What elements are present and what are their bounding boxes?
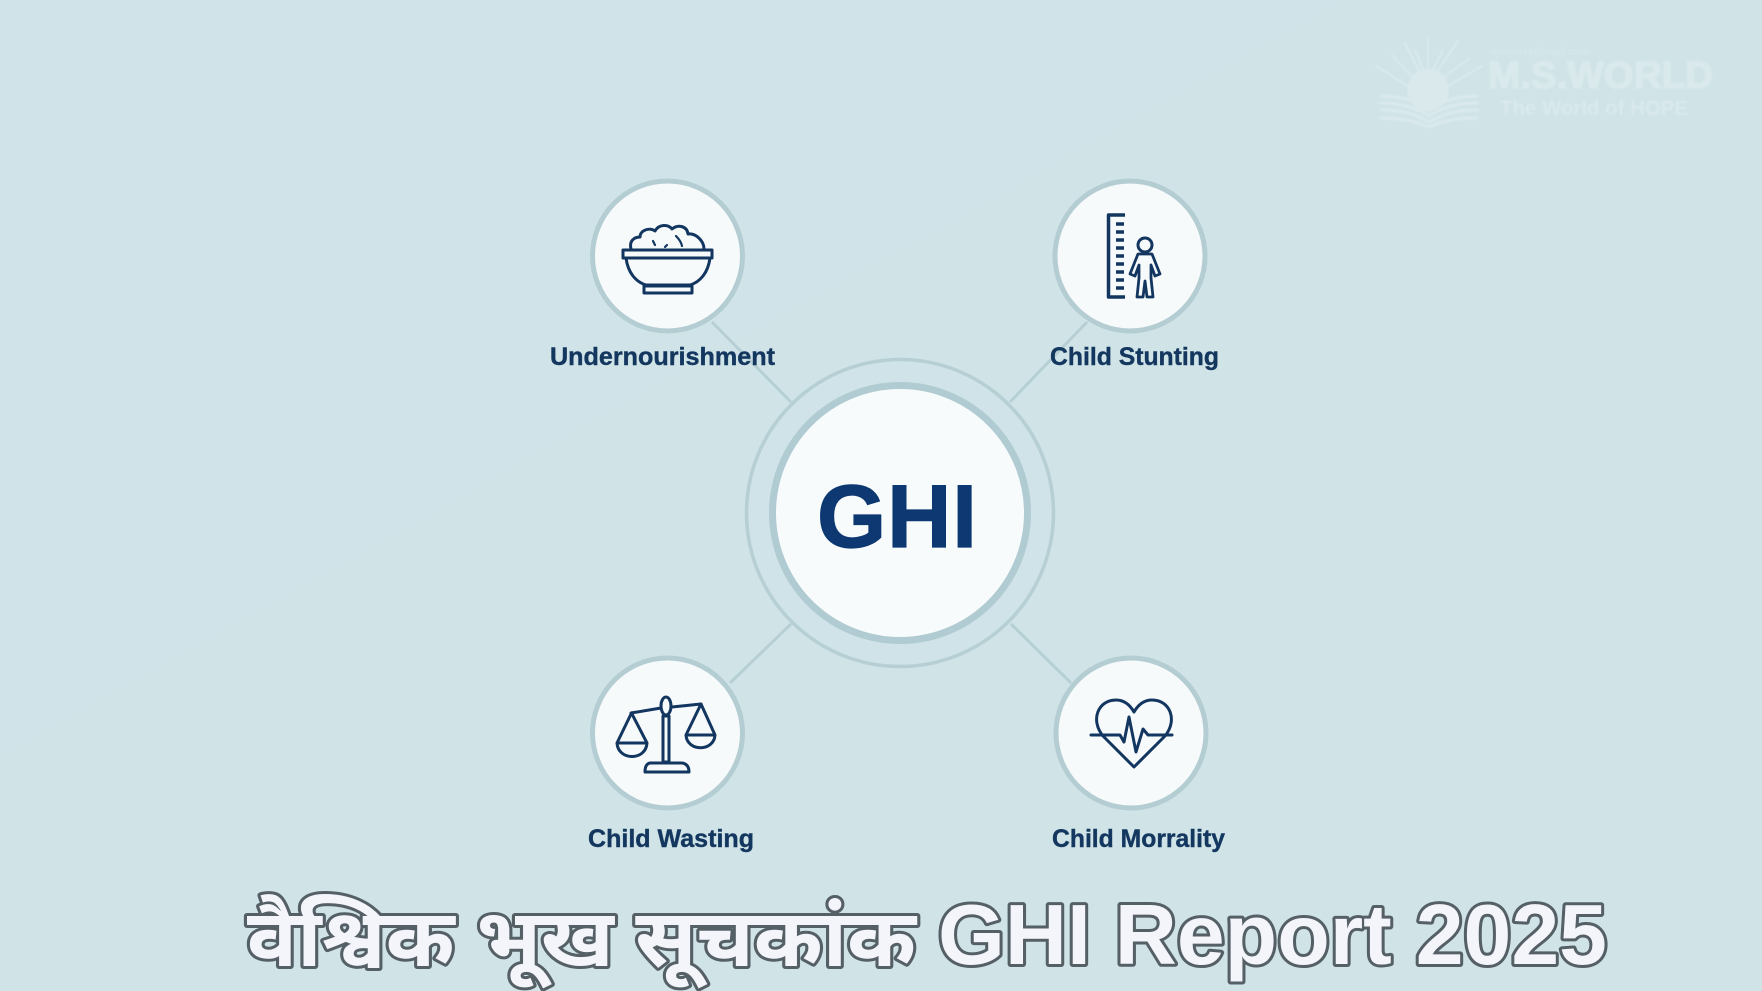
label: Child Wasting	[588, 825, 754, 853]
label: Undernourishment	[550, 343, 776, 371]
label: Child Stunting	[1050, 343, 1219, 371]
logo: text: M.S.WORLD	[1488, 55, 1713, 97]
node: Undernourishment	[550, 181, 776, 371]
central GHI hub	[746, 360, 1054, 666]
GHI label: GHI	[817, 466, 977, 566]
title	[247, 888, 1607, 991]
logo: text: msworld@mail.com	[1490, 47, 1590, 58]
icon: child with height ruler	[1108, 215, 1160, 297]
logo: text: The World of HOPE	[1500, 97, 1688, 120]
title: GHI Report 2025	[938, 888, 1607, 983]
icon: balance scale	[617, 697, 715, 772]
icon: rice bowl	[623, 225, 712, 293]
node: Child Stunting	[1050, 181, 1219, 371]
icon: heart with pulse	[1091, 700, 1172, 767]
node: Child Morrality	[1052, 658, 1225, 853]
label: Child Morrality	[1052, 825, 1225, 853]
node: Child Wasting	[588, 658, 754, 853]
logo: text	[1488, 47, 1713, 120]
logo: sunrise over open book	[1376, 37, 1482, 127]
watermark logo	[1376, 37, 1713, 127]
connector lines	[712, 322, 1087, 683]
